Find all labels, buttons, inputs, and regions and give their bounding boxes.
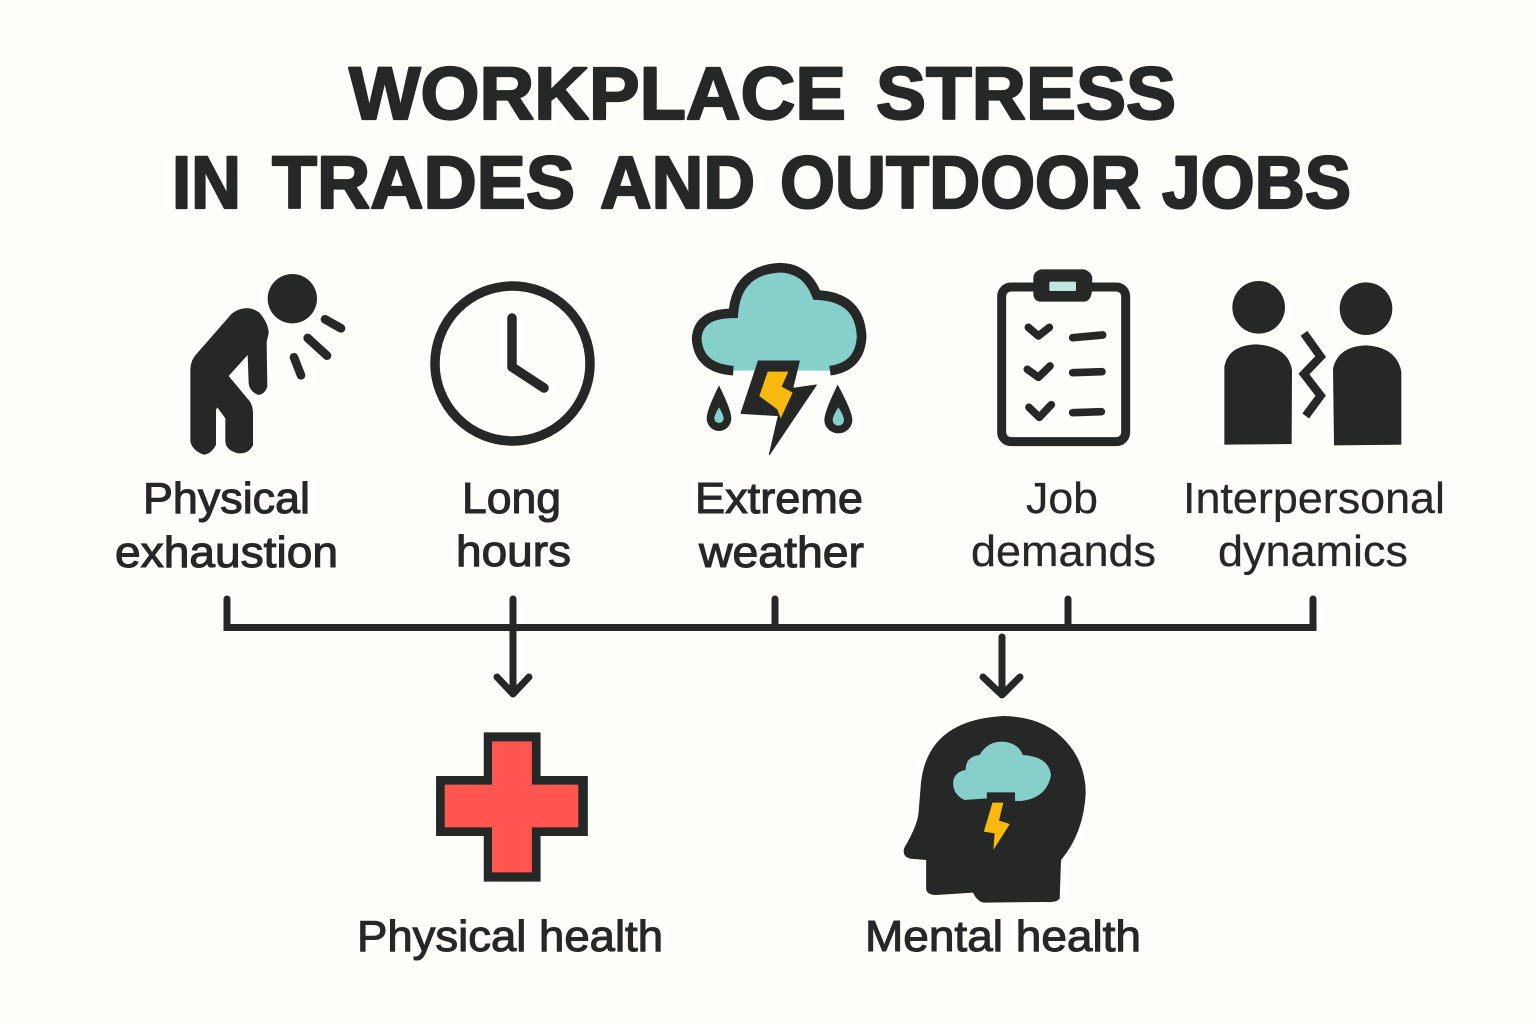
label: Mental health: Mental health [865, 912, 1141, 961]
label: Long hours: hours [456, 527, 571, 576]
title: WORKPLACE [349, 52, 846, 135]
arrow: to physical health [497, 628, 529, 694]
title [172, 52, 1351, 224]
label: Interpersonal dynamics: Interpersonal [1183, 474, 1445, 523]
title: OUTDOOR [780, 141, 1141, 224]
arrow: to mental health [983, 637, 1020, 695]
label: Interpersonal dynamics: dynamics [1218, 527, 1408, 576]
label: Extreme weather: weather [698, 528, 864, 577]
icon: two people in conflict [1224, 281, 1401, 445]
title: STRESS [876, 52, 1176, 135]
title: JOBS [1162, 141, 1351, 224]
label: Extreme weather [695, 474, 864, 577]
title: TRADES [272, 141, 575, 224]
label: Interpersonal dynamics [1183, 474, 1445, 576]
label: Job demands: Job [1026, 474, 1098, 523]
icon: head with storm [904, 716, 1086, 903]
label: Job demands [971, 474, 1156, 576]
title: IN [172, 141, 241, 224]
label: Physical health: Physical health [357, 912, 663, 961]
icon: exhausted person [190, 274, 341, 455]
title: AND [600, 141, 755, 224]
icon: clipboard checklist [1002, 269, 1126, 442]
icon: red cross [436, 732, 588, 882]
connector bracket [227, 599, 1313, 628]
icon: storm cloud [697, 268, 862, 455]
icon: clock [435, 286, 590, 441]
label: Long hours [456, 474, 571, 576]
label: Long hours: Long [462, 474, 561, 523]
label: Extreme weather: Extreme [695, 474, 863, 523]
label: Physical exhaustion: Physical [143, 474, 310, 523]
label: Job demands: demands [971, 527, 1156, 576]
label: Physical exhaustion: exhaustion [115, 528, 338, 577]
label: Physical exhaustion [115, 474, 338, 577]
